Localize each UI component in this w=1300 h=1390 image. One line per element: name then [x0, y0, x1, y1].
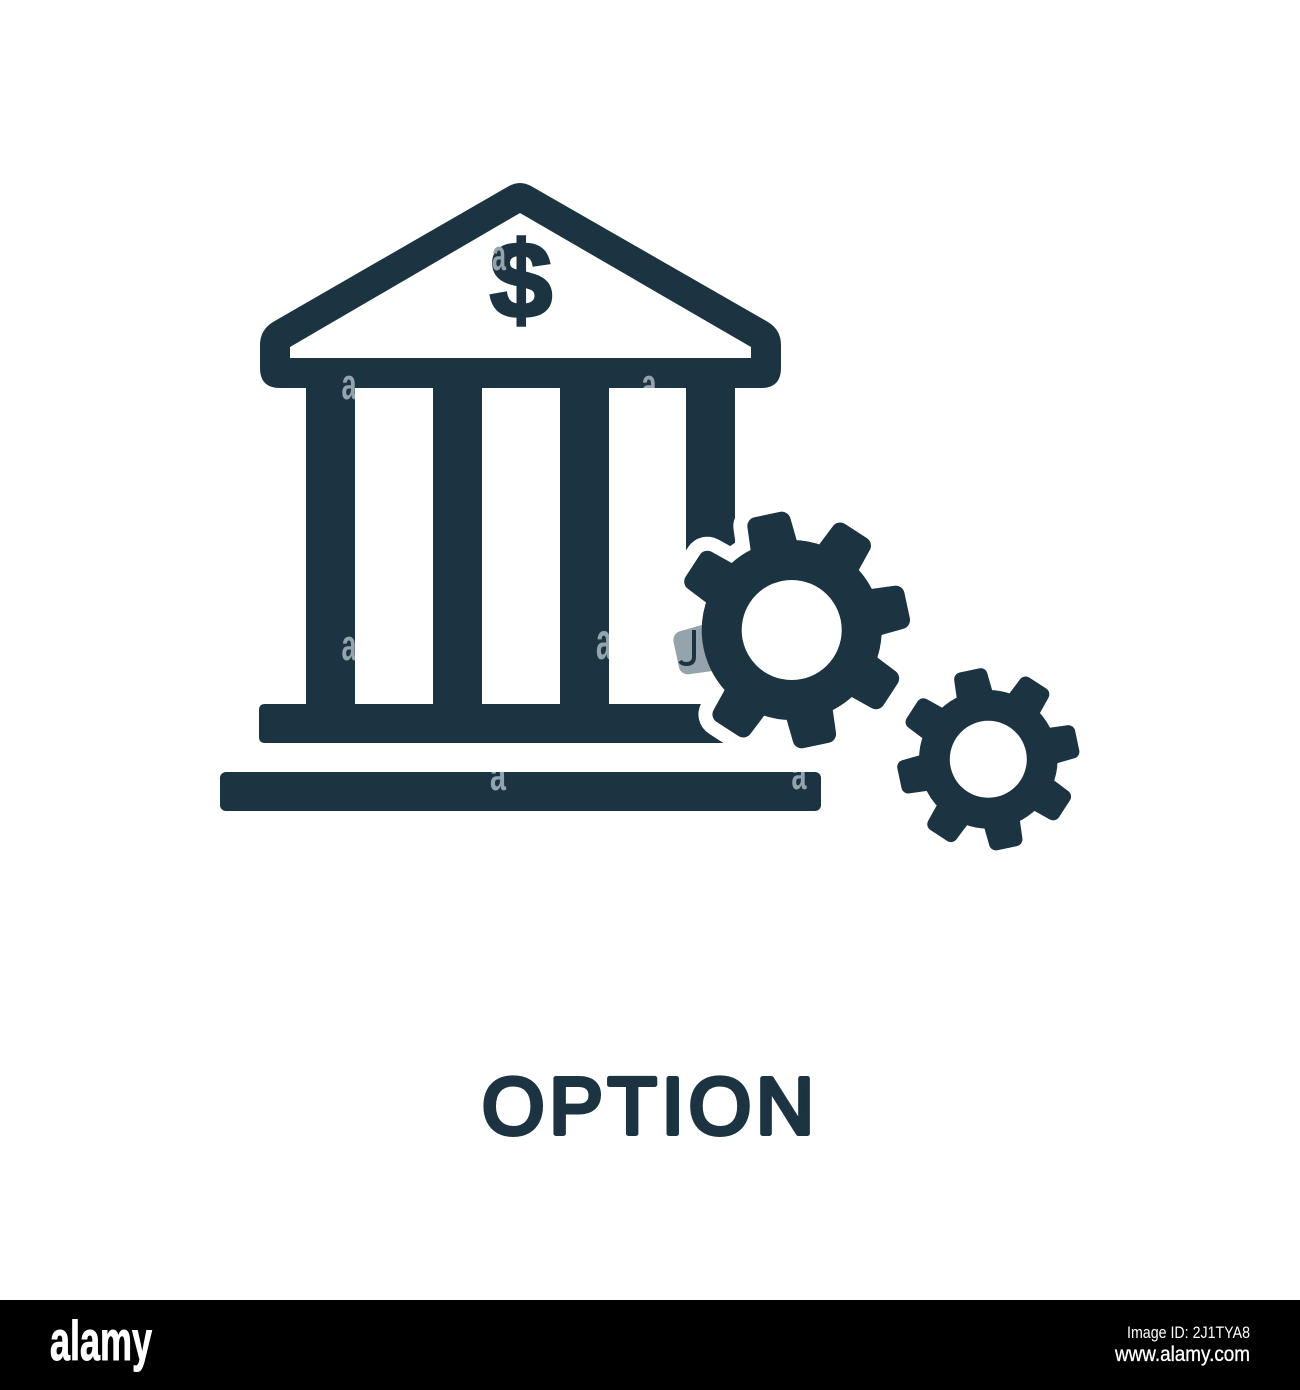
website: www.alamy.com [1114, 1343, 1250, 1366]
watermark letters [342, 231, 807, 800]
watermark letters: a [596, 613, 613, 671]
watermark letters: a [642, 360, 657, 409]
watermark letters: a [342, 621, 357, 670]
large gear [680, 520, 901, 740]
title: OPTION [482, 1062, 819, 1150]
bank columns [306, 380, 735, 710]
watermark letters: a [792, 750, 807, 799]
icon: dollar sign: $ [490, 219, 552, 340]
upper base step [259, 704, 730, 743]
watermark fragment on gear tooth [680, 630, 694, 664]
gear shape [682, 520, 901, 740]
small gear [904, 675, 1073, 844]
footer bar [0, 1300, 1300, 1390]
lower base step [220, 772, 821, 811]
icon: bank building [220, 183, 821, 811]
watermark letters: a [342, 360, 357, 409]
watermark letters: a [490, 751, 506, 800]
bank roof [260, 183, 781, 388]
gear halo [692, 520, 901, 740]
watermark letters: a [492, 231, 506, 280]
image id: Image ID: 2J1TYA8 [1127, 1323, 1250, 1342]
footer logo: alamy [50, 1309, 152, 1372]
